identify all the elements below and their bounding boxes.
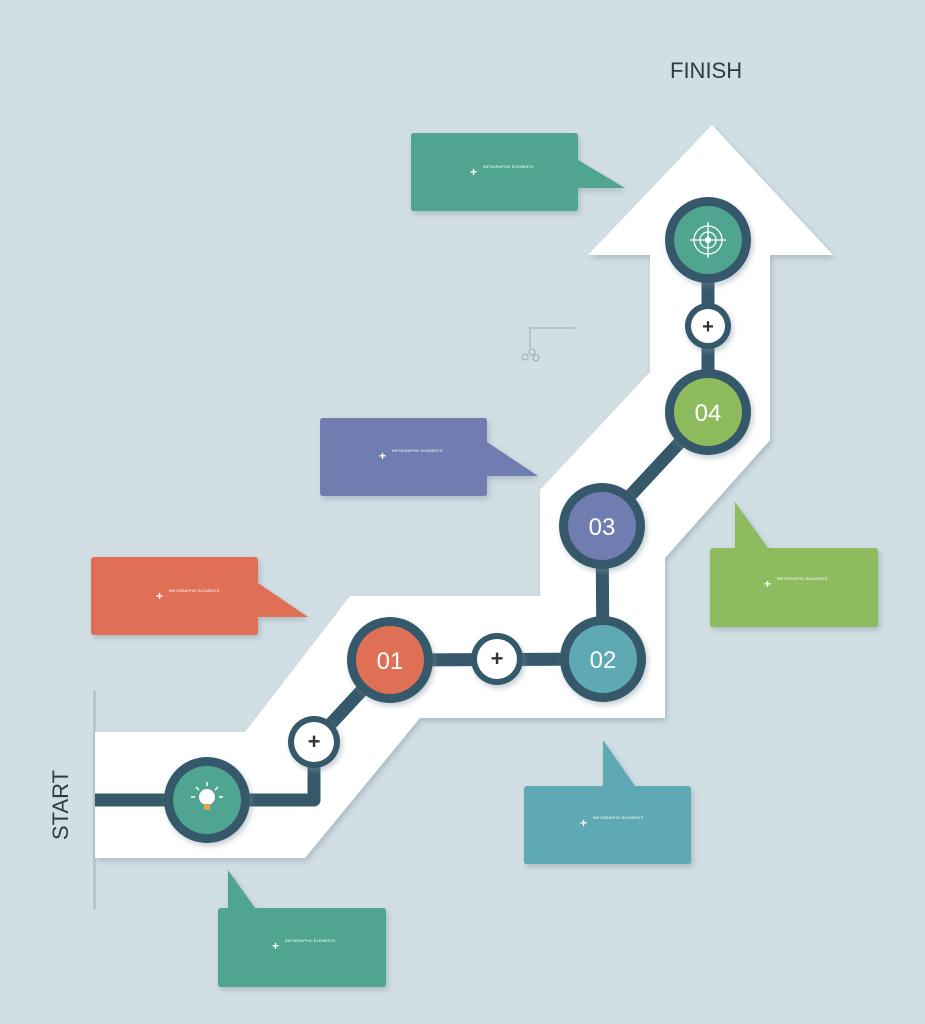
icon: target xyxy=(690,222,726,258)
start line xyxy=(93,690,96,910)
node: plus 1 xyxy=(288,716,340,768)
node: 03: 03 xyxy=(589,514,615,541)
node: 02: 02 xyxy=(590,647,616,674)
node: plus 2: + xyxy=(491,646,503,671)
callout: orange: + xyxy=(156,589,163,603)
callout: orange: INFOGRAPHIC ELEMENTS xyxy=(169,588,220,593)
callout: top green: + xyxy=(470,165,477,179)
node: 04: 04 xyxy=(695,400,721,427)
callout: purple: INFOGRAPHIC ELEMENTS xyxy=(392,448,443,453)
callout: bottom green: INFOGRAPHIC ELEMENTS xyxy=(285,938,336,943)
node: bulb xyxy=(164,757,250,843)
callout: orange xyxy=(91,557,308,635)
node: plus 3 xyxy=(685,303,731,349)
connector path xyxy=(95,240,708,800)
icon: bulb xyxy=(191,782,223,810)
node: 01 xyxy=(347,617,433,703)
node: target xyxy=(665,197,751,283)
node: plus 1: + xyxy=(308,729,320,754)
callout: teal: INFOGRAPHIC ELEMENTS xyxy=(593,815,644,820)
small chart decoration xyxy=(522,328,575,361)
node: plus 3: + xyxy=(702,316,714,338)
node: 04 xyxy=(665,369,751,455)
node: plus 2 xyxy=(471,633,523,685)
node: 03 xyxy=(559,483,645,569)
callout: lime: INFOGRAPHIC ELEMENTS xyxy=(777,576,828,581)
title: start: START xyxy=(48,770,73,840)
callout: teal: + xyxy=(580,816,587,830)
node: 02 xyxy=(560,616,646,702)
arrow road xyxy=(95,125,833,858)
callout: lime: + xyxy=(764,577,771,591)
callout: purple xyxy=(320,418,538,496)
callout: top green: INFOGRAPHIC ELEMENTS xyxy=(483,164,534,169)
callout: teal xyxy=(524,740,691,864)
node: 01: 01 xyxy=(377,648,403,675)
title: finish: FINISH xyxy=(670,58,742,83)
callout: bottom green: + xyxy=(272,939,279,953)
callout: lime xyxy=(710,502,878,627)
callout: top green xyxy=(411,133,625,211)
callout: bottom green xyxy=(218,870,386,987)
callout: purple: + xyxy=(379,449,386,463)
